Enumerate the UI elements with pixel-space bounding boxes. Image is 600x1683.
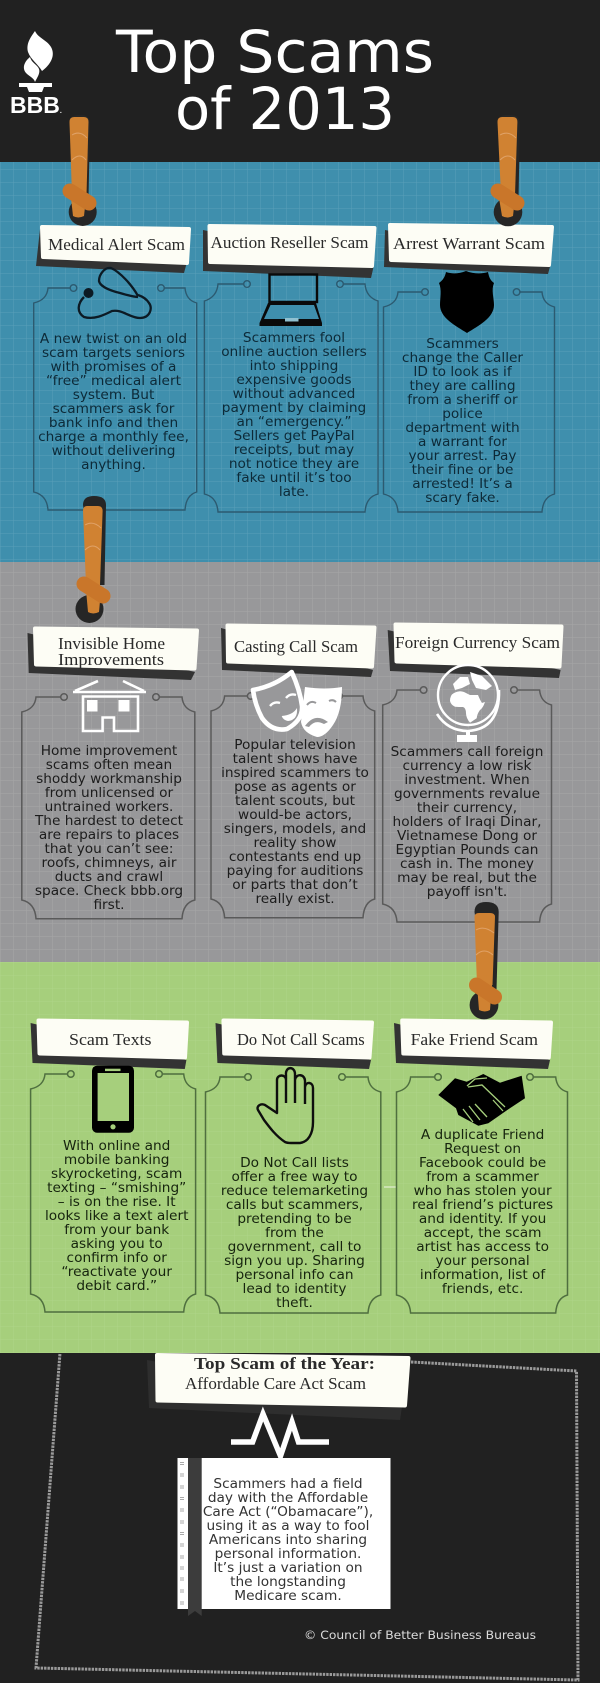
body text: pose as agents or [234,779,356,795]
body text: Request on [444,1141,521,1157]
body text: scary fake. [425,490,500,506]
label: Foreign Currency Scam [388,624,562,678]
body text: from a sheriff or [407,392,518,408]
card: Fake Friend Scam [394,1020,568,1313]
stray highlight dash [384,1186,396,1188]
body text: from the [265,1225,324,1241]
body text: texting – “smishing” [47,1180,186,1196]
body text: are repairs to places [39,827,179,843]
label: Medical Alert Scam [36,227,189,273]
top scam of the year card: Top Scam of the Year: [194,1354,375,1373]
body text: and identity. If you [419,1211,546,1227]
body text: without delivering [52,443,175,459]
label: Casting Call Scam [221,626,374,677]
body text: payment by claiming [222,400,366,416]
frame [384,289,554,512]
body text: their currency, [417,800,517,816]
body text: The hardest to detect [34,813,184,829]
frame [206,1074,381,1313]
body text: police [442,406,483,422]
notepad text: Americans into sharing [209,1532,367,1548]
body text: space. Check bbb.org [35,883,183,899]
body text: “free” medical alert [46,373,182,389]
body text: from a scammer [426,1169,539,1185]
notepad text: Scammers had a field [213,1476,363,1492]
notepad text: Care Act (“Obamacare”), [203,1504,373,1520]
body text: investment. When [404,772,530,788]
label: Invisible Home Improvements: Improvements [58,650,164,669]
frame [396,1074,568,1313]
frame [31,1071,196,1312]
body text: confirm info or [67,1250,167,1266]
body text: currency a low risk [403,758,532,774]
card: Do Not Call Scams [206,1020,381,1313]
card: Arrest Warrant Scam [384,225,554,512]
body text: shoddy workmanship [36,771,182,787]
green section background [0,962,600,1353]
body text: skyrocketing, scam [51,1166,182,1182]
grey section background [0,562,600,962]
body text: Home improvement [41,743,178,759]
body text: government, call to [228,1239,361,1255]
notepad text: Medicare scam. [234,1588,342,1604]
rope: header to Medical Alert [69,115,97,226]
body text: first. [93,897,125,913]
body text: governments revalue [394,786,540,802]
body text: real friend’s pictures [412,1197,553,1213]
body text: with promises of a [51,359,176,375]
card: Invisible Home Improvements [22,628,197,919]
body text: late. [279,484,309,500]
BBB logo [10,31,62,118]
icon: police badge [439,271,494,333]
body text: they are calling [409,378,516,394]
body text: anything. [81,457,146,473]
label: Scam Texts: Scam Texts [69,1030,152,1049]
notepad text: day with the Affordable [208,1490,368,1506]
rope: header to Arrest Warrant [494,115,522,226]
body text: Vietnamese Dong or [397,828,537,844]
body text: “reactivate your [61,1264,172,1280]
body text: cash in. The money [400,856,534,872]
body text: contestants end up [229,849,361,865]
body text: from unlicensed or [45,785,174,801]
label: Do Not Call Scams: Do Not Call Scams [237,1030,365,1049]
card: Casting Call Scam [211,626,375,918]
body text: asking you to [71,1236,163,1252]
title: of 2013 [175,75,395,143]
body text: would-be actors, [238,807,352,823]
body text: looks like a text alert [45,1208,189,1224]
body text: Scammers fool [243,330,345,346]
body text: scammers ask for [53,401,175,417]
body text: your personal [435,1253,530,1269]
heartbeat line [231,1414,329,1456]
body text: debit card.” [76,1278,157,1294]
label: Invisible Home Improvements: Invisible Home [58,634,165,653]
frame [383,687,552,922]
body text: lead to identity [243,1281,346,1297]
label: Scam Texts [31,1020,187,1069]
card: Medical Alert Scam [34,227,197,510]
copyright footer: © Council of Better Business Bureaus [304,1628,536,1642]
body text: holders of Iraqi Dinar, [393,814,541,830]
header band [0,0,600,163]
notepad text: personal information. [215,1546,361,1562]
body text: Scammers [426,336,499,352]
label: Arrest Warrant Scam [384,225,552,274]
BBB logo: BBB. [10,92,62,118]
label: Foreign Currency Scam: Foreign Currency Scam [395,633,560,652]
label: Invisible Home Improvements [28,628,197,680]
body text: sign you up. Sharing [224,1253,365,1269]
body text: Popular television [234,737,356,753]
body text: that you can’t see: [45,841,173,857]
body text: expensive goods [236,372,352,388]
body text: from your bank [64,1222,169,1238]
body text: mobile banking [64,1152,170,1168]
body text: without advanced [233,386,355,402]
body text: personal info can [235,1267,354,1283]
body text: charge a monthly fee, [38,429,189,445]
body text: change the Caller [402,350,523,366]
body text: your arrest. Pay [409,448,516,464]
body text: their fine or be [412,462,513,478]
body text: system. But [73,387,155,403]
body text: arrested! It’s a [412,476,513,492]
body text: online auction sellers [221,344,367,360]
label: Casting Call Scam: Casting Call Scam [234,637,358,656]
icon: stethoscope [79,268,151,318]
body text: Egyptian Pounds can [396,842,538,858]
body text: talent shows have [233,751,357,767]
body text: department with [405,420,520,436]
body text: A duplicate Friend [421,1127,544,1143]
body text: an “emergency.” [237,414,351,430]
notepad text: It’s just a variation on [213,1560,363,1576]
card: Auction Reseller Scam [203,226,378,512]
rope: Foreign Currency to Fake Friend [470,902,499,1019]
body text: Do Not Call lists [240,1155,349,1171]
body text: theft. [276,1295,313,1311]
body text: talent scouts, but [235,793,356,809]
body text: a warrant for [418,434,507,450]
body text: scam targets seniors [42,345,185,361]
body text: receipts, but may [234,442,354,458]
title: Top Scams [115,18,434,86]
body text: pretending to be [237,1211,352,1227]
body text: reality show [254,835,336,851]
dark footer section background [0,1353,600,1683]
body text: roofs, chimneys, air [42,855,177,871]
icon: globe [437,665,499,742]
icon: laptop [260,274,322,326]
body text: friends, etc. [442,1281,523,1297]
body text: ducts and crawl [55,869,163,885]
body text: – is on the rise. It [58,1194,176,1210]
icon: theatre masks [253,672,342,737]
icon: house [73,681,146,731]
notepad text: using it as a way to fool [207,1518,369,1534]
body text: Scammers call foreign [391,744,543,760]
body text: into shipping [250,358,338,374]
body text: reduce telemarketing [221,1183,368,1199]
body text: who has stolen your [414,1183,552,1199]
frame [34,285,197,510]
body text: may be real, but the [397,870,537,886]
dotted frame [36,1353,578,1680]
icon: handshake [438,1074,525,1126]
body text: paying for auditions [227,863,363,879]
body text: singers, models, and [224,821,366,837]
frame [22,694,195,919]
label: Auction Reseller Scam [203,226,374,278]
body text: Facebook could be [419,1155,546,1171]
label: Medical Alert Scam: Medical Alert Scam [48,235,185,254]
label: Do Not Call Scams [216,1020,372,1069]
body text: ID to look as if [413,364,513,380]
frame [211,693,375,918]
body text: or parts that don’t [232,877,358,893]
card: Foreign Currency Scam [383,624,562,922]
label: Fake Friend Scam: Fake Friend Scam [411,1030,538,1049]
body text: With online and [63,1138,170,1154]
body text: scams often mean [46,757,172,773]
body text: really exist. [255,891,335,907]
body text: not notice they are [229,456,359,472]
body text: inspired scammers to [221,765,369,781]
label: Fake Friend Scam [394,1020,551,1069]
blue section background [0,162,600,562]
label: Arrest Warrant Scam: Arrest Warrant Scam [393,234,545,253]
body text: Sellers get PayPal [233,428,355,444]
notepad [178,1458,390,1616]
body text: calls but scammers, [226,1197,363,1213]
body text: artist has access to [416,1239,549,1255]
body text: bank info and then [49,415,178,431]
label: Auction Reseller Scam: Auction Reseller Scam [210,233,368,252]
body text: offer a free way to [231,1169,358,1185]
top scam of the year card: Affordable Care Act Scam [185,1374,366,1393]
icon: raised hand [258,1068,313,1143]
title [115,18,434,143]
body text: information, list of [420,1267,546,1283]
body text: payoff isn't. [427,884,507,900]
body text: untrained workers. [45,799,173,815]
body text: A new twist on an old [40,331,187,347]
body text: accept, the scam [424,1225,542,1241]
rope: Medical Alert to Invisible Home [76,496,106,623]
icon: smartphone [92,1066,134,1133]
card: Scam Texts [31,1020,196,1312]
body text: fake until it’s too [236,470,352,486]
top scam of the year card [147,1354,408,1420]
notepad text: the longstanding [230,1574,346,1590]
frame [204,281,378,512]
